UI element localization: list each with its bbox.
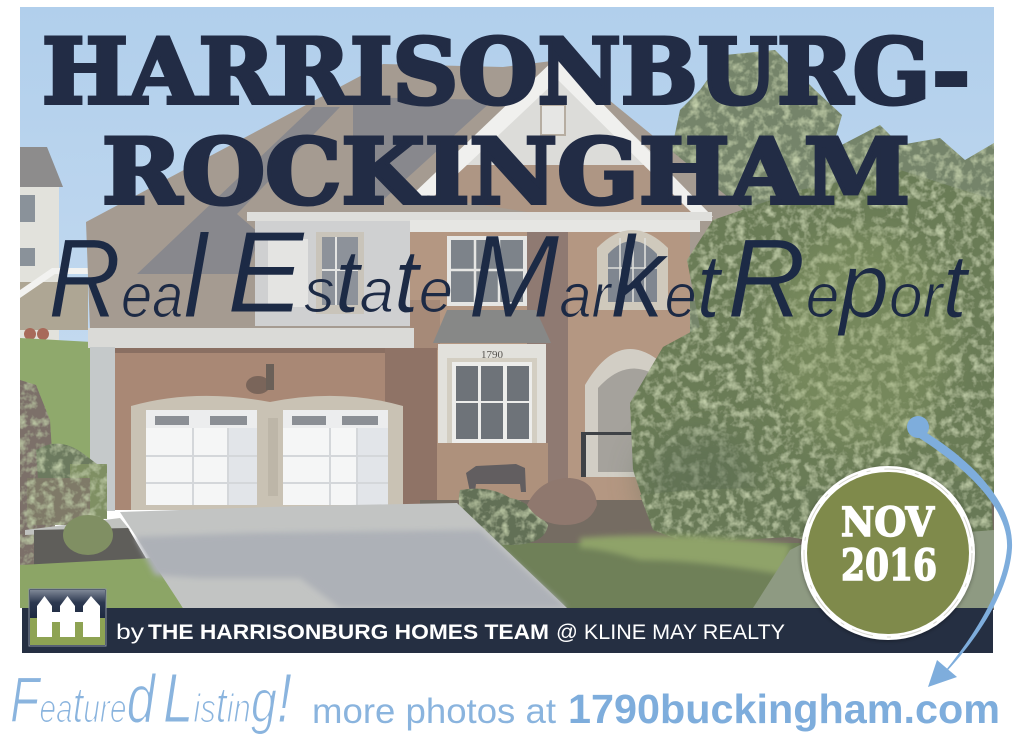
subtitle: Real Estate Market Report: Real: [48, 211, 210, 343]
title: Harrisonburg-Rockingham: HARRISONBURG-: [42, 19, 970, 125]
more photos text: more photos at: [312, 692, 556, 731]
byline: by: [116, 621, 145, 644]
date badge: [801, 466, 975, 640]
right lawn: [487, 543, 800, 608]
front bush: [630, 170, 994, 495]
byline: @ KLINE MAY REALTY: [556, 621, 785, 644]
background trees: [672, 50, 994, 332]
bench: [466, 464, 526, 492]
left shrubs: [20, 380, 107, 572]
main roof: [86, 60, 750, 330]
bay window: [438, 344, 546, 444]
featured listing caption: Listing!: [163, 659, 292, 737]
lawn behind shrubs: [20, 338, 90, 459]
upper storey walls: [247, 212, 712, 500]
entry arch: [581, 349, 664, 477]
footer bar: [22, 608, 993, 653]
subtitle: Real Estate Market Report: Estate: [227, 207, 453, 337]
driveway shadow: [135, 530, 567, 608]
sky: [20, 7, 994, 347]
subtitle: Real Estate Market Report: Market: [468, 211, 724, 343]
bay roof: [433, 310, 551, 343]
garage doors: [146, 410, 388, 505]
front bush lower edge: [640, 486, 993, 540]
foundation shrubs: [459, 489, 548, 545]
gable: [413, 57, 713, 217]
driveway: [120, 503, 567, 608]
bush lighting: [640, 230, 950, 530]
brick below bay: [438, 443, 548, 492]
badge text: NOV: [841, 499, 935, 546]
badge text: 2016: [841, 541, 937, 591]
subtitle: Real Estate Market Report: Report: [727, 216, 971, 341]
neighbouring house: [20, 147, 88, 342]
garage door surround: [131, 396, 403, 510]
logo: picket fence: [29, 589, 106, 646]
subtitle: Real Estate Market Report: [48, 207, 971, 343]
badge text: [841, 499, 937, 591]
garage lantern: [246, 364, 274, 394]
front left lawn: [20, 558, 183, 608]
arrow from photo to website: [907, 416, 1012, 687]
featured listing caption: [10, 659, 292, 737]
sunlit lawn patch: [580, 535, 790, 575]
byline: THE HARRISONBURG HOMES TEAM: [148, 621, 549, 644]
ground behind lawn: [420, 500, 994, 610]
website address: 1790buckingham.com: [568, 686, 1000, 732]
japanese maple: [527, 478, 597, 525]
byline: [116, 621, 785, 644]
title: Harrisonburg-Rockingham: ROCKINGHAM: [102, 119, 910, 225]
garage block: [88, 328, 437, 511]
house number: 1790: [481, 349, 504, 361]
hillside and rock: [753, 530, 994, 608]
featured listing caption: Featured: [10, 661, 157, 737]
roof shadows: [137, 97, 493, 274]
sidewalk and mulch: [25, 515, 150, 567]
title: Harrisonburg-Rockingham: [42, 19, 970, 225]
